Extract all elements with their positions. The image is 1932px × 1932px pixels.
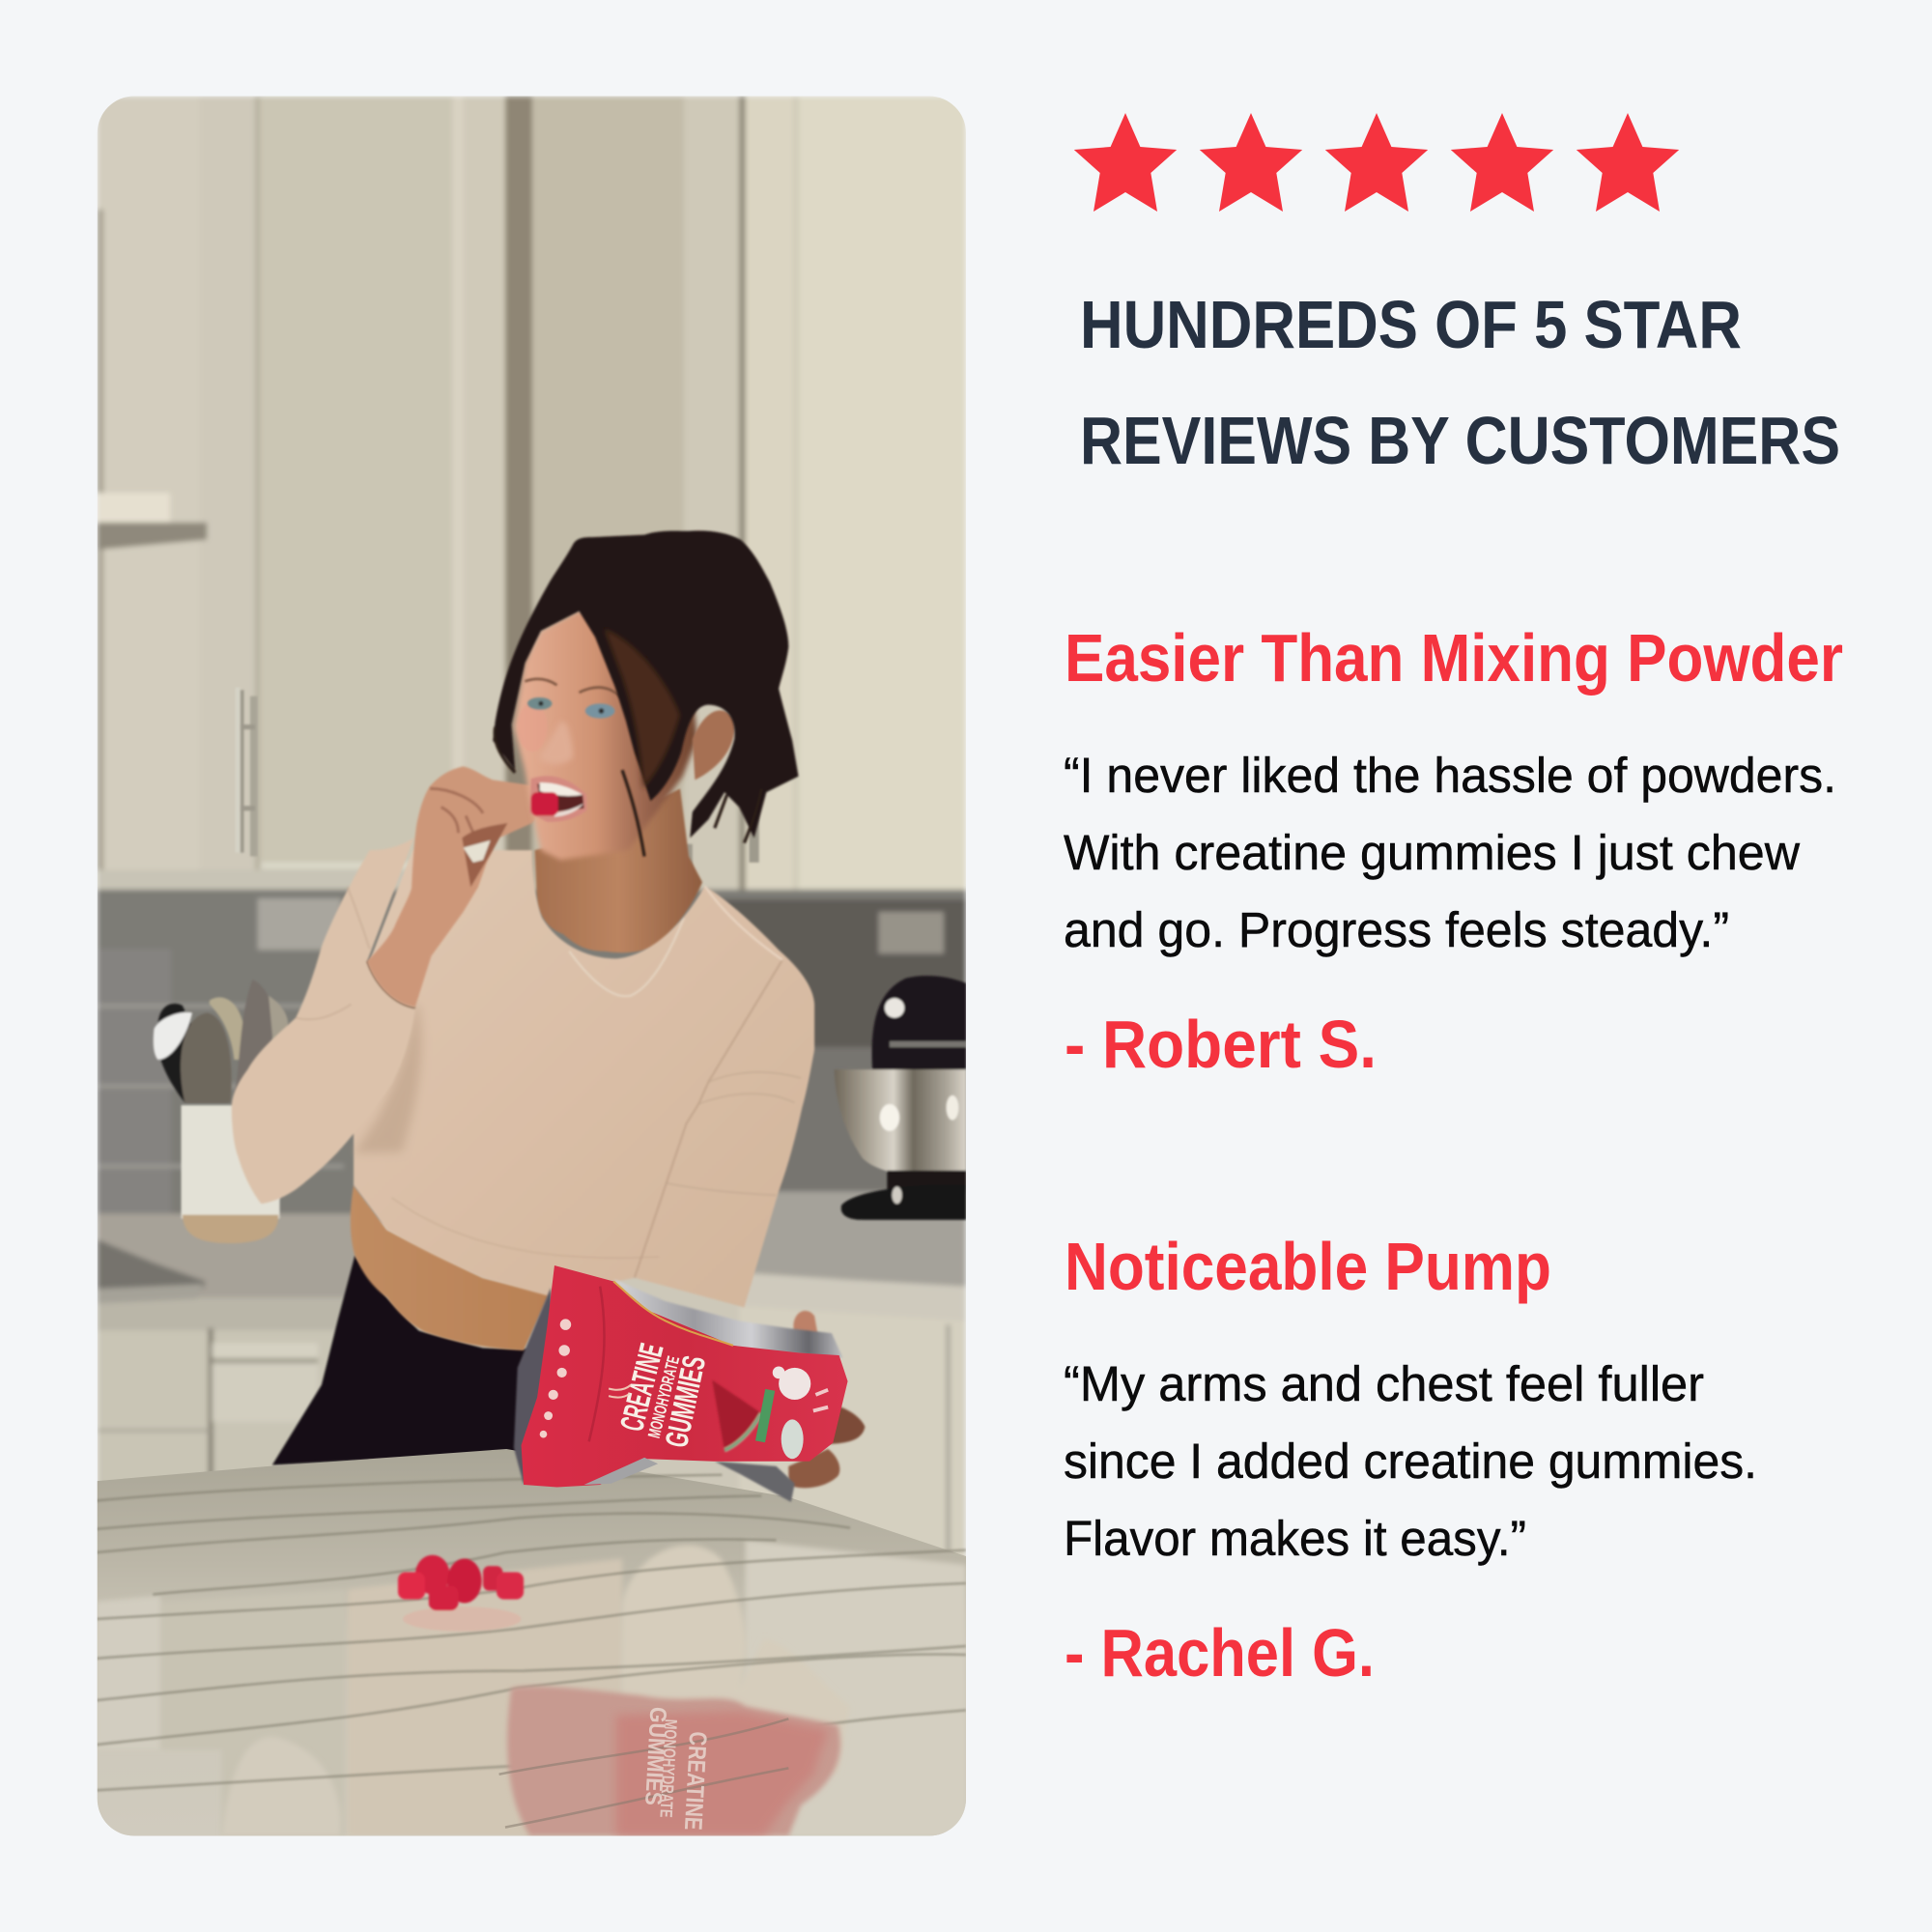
- sweater right sleeve seam: [635, 960, 782, 1278]
- review 1: easier than mixing powder: [1064, 620, 1843, 1082]
- shadow inside hand: [462, 823, 508, 887]
- pouch label text: [613, 1340, 713, 1451]
- pouch bottom foil sliver: [584, 1458, 658, 1485]
- pouch side icons: [540, 1319, 631, 1438]
- backsplash: [98, 890, 966, 1222]
- reflected bag flipped label: MONOHYDRATE: [656, 1719, 681, 1818]
- range hood: [98, 493, 207, 550]
- rating: five red stars: [1074, 113, 1679, 212]
- review 1 quote: With creatine gummies I just chew: [1064, 825, 1800, 880]
- brown hair strands at temple: [604, 629, 680, 788]
- back counter right: [727, 1191, 966, 1288]
- sweater torso and shoulders: [354, 850, 814, 1307]
- review 2 quote: Flavor makes it easy.”: [1064, 1511, 1526, 1566]
- photo: creatine gummies pouch: [514, 1265, 848, 1502]
- heading: hundreds of 5 star reviews: [1080, 287, 1840, 478]
- photo: kitchen background: [98, 96, 966, 1836]
- sweater lower band seam: [392, 1198, 659, 1258]
- sweater left arm: [232, 838, 415, 1204]
- photo: hand and wrist at mouth: [367, 766, 549, 1007]
- reflected bag red panel: [616, 1712, 828, 1836]
- photo: ear: [693, 710, 735, 780]
- reflected bag flipped label: GUMMIES: [639, 1706, 670, 1806]
- pouch label text: GUMMIES: [659, 1352, 713, 1451]
- photo: mouth with gummy: [529, 776, 586, 822]
- photo: hand fingers around bag: [788, 1311, 865, 1488]
- countertop reflection: arm: [222, 1737, 341, 1836]
- finger creases: [430, 788, 483, 836]
- review 1 quote: “I never liked the hassle of powders.: [1064, 748, 1836, 803]
- sweater gap near hand: [464, 840, 491, 863]
- reflected bag pink body: [507, 1687, 840, 1836]
- photo: face: [514, 611, 697, 860]
- pouch foil top: [613, 1279, 842, 1358]
- stove top: [98, 1239, 206, 1303]
- pouch brand mark: [813, 1390, 828, 1410]
- photo: gummies on counter: [398, 1555, 524, 1632]
- review 2: noticeable pump: [1064, 1229, 1757, 1690]
- review 2 quote: [1064, 1356, 1757, 1566]
- necklace: [569, 918, 684, 996]
- pouch watermelon: [712, 1380, 761, 1450]
- outlets: [258, 898, 944, 953]
- pouch red body: [522, 1265, 848, 1488]
- lower cabinets right: [946, 1325, 960, 1554]
- right cabinet handles: [686, 817, 760, 864]
- arm fold line: [296, 887, 370, 1019]
- back counter left: [98, 1213, 362, 1300]
- countertop reflection: cabinet blocks: [96, 1540, 966, 1836]
- pouch foil bottom right: [715, 1462, 795, 1502]
- reflected bag vein: [499, 1719, 788, 1828]
- lower cabinets left: [98, 1326, 321, 1472]
- photo: beige ribbed sweater: [232, 838, 814, 1307]
- reflected bag flipped label: [639, 1706, 711, 1831]
- review 2 quote: “My arms and chest feel fuller: [1064, 1356, 1704, 1411]
- photo: eyes, brows, nose and cheek: [518, 679, 621, 764]
- pouch label text: CREATINE: [613, 1340, 671, 1435]
- heading: hundreds of 5 star reviews: HUNDREDS OF 5 STAR: [1080, 287, 1742, 362]
- stand mixer: [835, 976, 966, 1220]
- review 1 title: Easier Than Mixing Powder: [1065, 620, 1843, 696]
- reflected bag flipped label: CREATINE: [679, 1731, 711, 1831]
- shoulder seam: [705, 886, 782, 960]
- cabinet handle: [236, 688, 258, 856]
- countertop reflection: sleeve: [622, 1545, 850, 1775]
- pouch foil left gusset: [514, 1288, 554, 1485]
- heading: hundreds of 5 star reviews: REVIEWS BY CUSTOMERS: [1080, 403, 1840, 478]
- pouch zipper band: [589, 1287, 605, 1441]
- counter front edge left: [98, 1299, 342, 1331]
- countertop veins: [96, 1475, 966, 1790]
- utensil crock: [154, 980, 288, 1243]
- review 1 quote: and go. Progress feels steady.”: [1064, 902, 1729, 957]
- cuff edge: [367, 961, 415, 1008]
- pouch gold edge: [613, 1282, 733, 1346]
- photo: midriff: [351, 1185, 550, 1350]
- counter front edge right: [956, 1286, 962, 1287]
- middle recessed cabinet: [502, 97, 684, 889]
- photo: neck and chest: [535, 788, 702, 952]
- photo: marble countertop: [96, 1449, 966, 1836]
- pouch gummy window: [781, 1419, 804, 1459]
- upper left cabinet: [97, 97, 463, 873]
- review 2 title: Noticeable Pump: [1065, 1229, 1551, 1304]
- pouch 120 count sticker: [773, 1367, 810, 1400]
- pouch label text: MONOHYDRATE: [644, 1354, 683, 1440]
- upper right cabinet: [739, 96, 966, 903]
- sweater sleeve folds: [666, 1072, 801, 1195]
- review 1 quote: [1064, 748, 1836, 957]
- review 1 author: - Robert S.: [1065, 1007, 1377, 1082]
- loose face strands: [495, 727, 761, 856]
- review 2 author: - Rachel G.: [1065, 1615, 1375, 1690]
- panel: kitchen photo of woman eating gummy: [96, 96, 966, 1836]
- photo: dark hair: [493, 530, 799, 856]
- review 2 quote: since I added creatine gummies.: [1064, 1434, 1757, 1489]
- photo: black pants: [272, 1256, 529, 1465]
- underarm shadow: [354, 1005, 421, 1153]
- pouch green badge: [760, 1390, 770, 1441]
